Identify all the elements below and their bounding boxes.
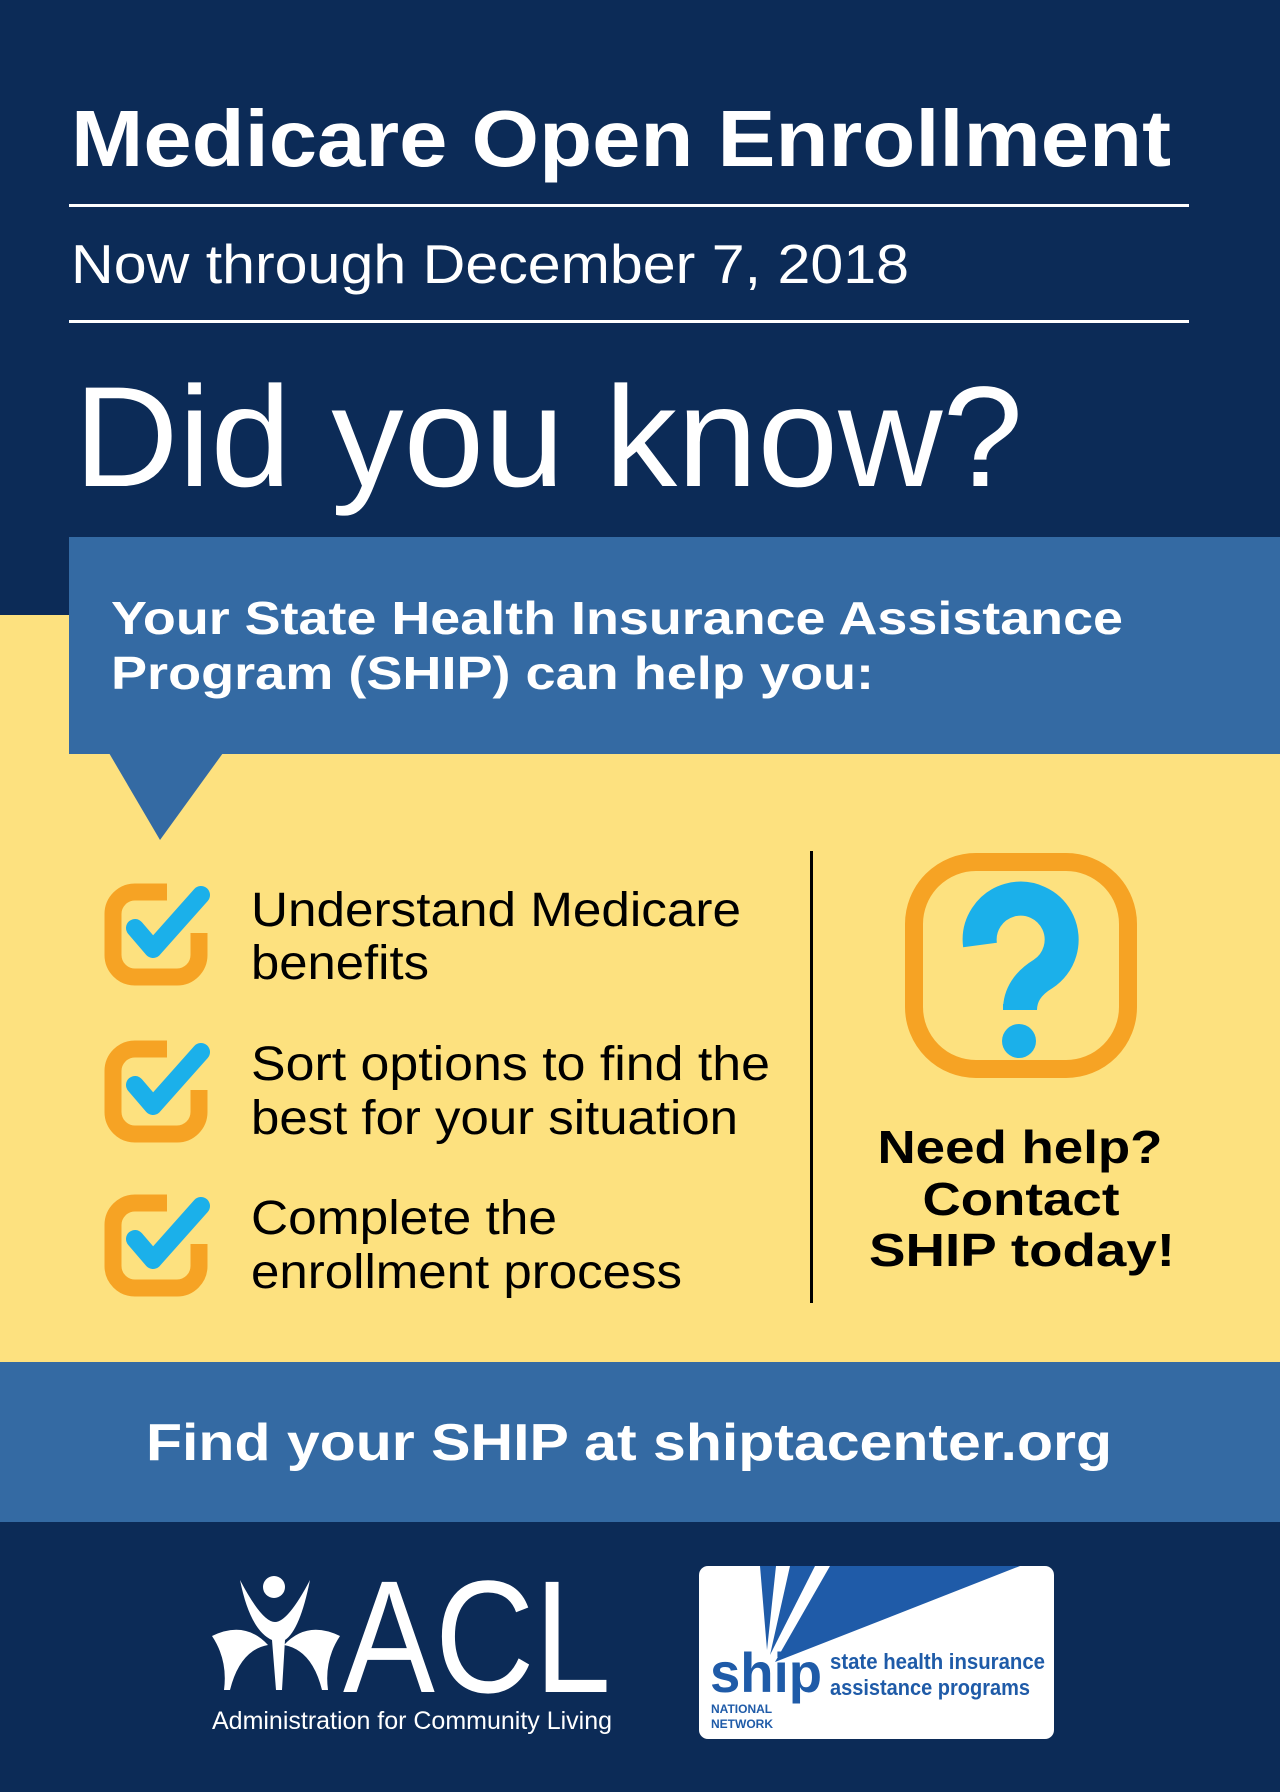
callout: SHIP speech box: Program (SHIP) can help you: [111,647,874,699]
icon: checkbox 1 [113,892,201,977]
callout: need help [869,1121,1175,1276]
checklist: best for your situation [251,1092,738,1145]
background top navy [0,0,1280,615]
item 3 text: Complete the [251,1192,557,1245]
logo: SHIP national network: NETWORK [711,1717,773,1731]
callout: SHIP speech box: Your State Health Insurance Assistance [111,592,1123,644]
checklist: enrollment process [251,1246,682,1299]
icon: question mark box [914,862,1128,1069]
logo: SHIP national network [699,1566,1054,1739]
icon: checkbox 2 [113,1049,201,1134]
logo: ACL: ACL [343,1547,611,1726]
logo: SHIP national network: state health insurance [830,1649,1045,1674]
callout: need help: Contact [922,1173,1120,1225]
checklist [113,884,770,1299]
subtitle: date: Now through December 7, 2018 [71,233,909,295]
item 1 text: Understand Medicare [251,884,741,937]
title: Medicare Open Enrollment [71,94,1171,183]
callout: need help: Need help? [878,1121,1162,1173]
heading: did you know: Did you know? [74,358,1023,517]
logo: SHIP national network: ship [710,1641,822,1704]
banner: find your SHIP [0,1362,1280,1522]
icon: ACL figures [212,1576,340,1690]
callout: SHIP speech box [69,537,1280,840]
logo: ACL: Administration for Community Living [212,1707,612,1735]
callout: need help: SHIP today! [869,1224,1175,1276]
yellow panel background [0,615,1280,1362]
logo: ACL [212,1547,612,1735]
icon: checkbox 3 [113,1203,201,1288]
item 2 text: Sort options to find the [251,1038,770,1091]
checklist: benefits [251,937,429,990]
logo: SHIP national network: assistance programs [830,1675,1030,1700]
banner: find your SHIP: Find your SHIP at shiptacenter.org [146,1414,1112,1472]
logo: SHIP national network: NATIONAL [711,1702,772,1716]
